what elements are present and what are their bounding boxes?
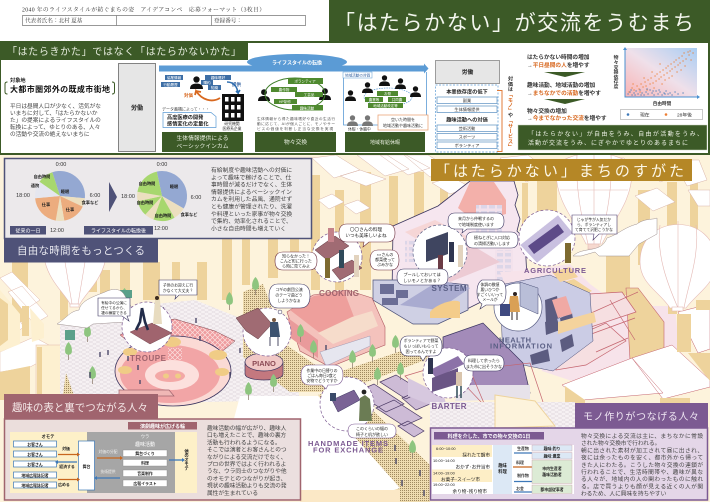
- text: barter description: 朝に出された素材が加工されて昼に出され、: [581, 446, 703, 454]
- theatre diagram: 地域広報誌記者: [21, 473, 49, 478]
- city illustration background: COOKING: [319, 289, 359, 298]
- goals list: →今までなかった交流を増やす: [527, 114, 607, 122]
- balloons: [45, 153, 710, 311]
- speech bubble: daily meal: 作業中の日替りの: [306, 368, 338, 373]
- labour box: [118, 64, 156, 152]
- scheme: barter: HP制作: [279, 99, 291, 104]
- speech bubble: pool: しいモノとかある？: [403, 277, 441, 284]
- text: free time description: とも健康が管理されたり、洗濯: [211, 202, 292, 210]
- pie chart: conventional day: 通院: [31, 182, 40, 189]
- scene labels: TROUPE: [130, 354, 167, 363]
- upper city blocks: [12, 155, 710, 322]
- heading: town view: 「はたらかない」まちのすがた: [435, 163, 684, 180]
- pie chart: conventional day: 従来の一日: [15, 228, 41, 234]
- white big roof: [215, 396, 400, 490]
- text: barter description: わるため、人に興味を持ちやすい: [581, 490, 667, 498]
- city illustration background: INFORMATION: [490, 342, 552, 350]
- theatre diagram: 地域広報誌記者: [21, 483, 49, 488]
- text: barter description: る人々が、地域内の人の関わったものに触れ: [581, 475, 703, 483]
- scheme: basic income: ベーシックインカム: [176, 143, 229, 150]
- piano drum: [245, 353, 283, 380]
- target area text block: 対象地: [10, 76, 26, 84]
- cooking building: [287, 290, 385, 367]
- speech box: child pickup: かなくて大丈夫？: [163, 288, 193, 293]
- text: hobby description: のオモテとのつながりが起き、: [207, 474, 286, 482]
- speech bubble: extra food: [464, 355, 504, 371]
- text: hobby description: プロの世界ではよく行われるよ: [207, 460, 286, 468]
- scheme: community paid leave: 農業等: [369, 97, 380, 102]
- pie chart: after lifestyle change: 自由時間: [139, 180, 155, 187]
- target area text block: 転換によって、ゆとりのある、人々: [10, 123, 100, 131]
- speech bubble: chair size: このくらいの幅の: [356, 425, 388, 431]
- theatre diagram: 広報イラスト: [133, 481, 157, 486]
- labour box: 労働: [131, 104, 143, 112]
- labour breakdown stack: 本業依存度の低下: [446, 88, 488, 96]
- thought bubble: theme song: しようかなぁ: [277, 298, 301, 303]
- market day table: 市内生産者: [542, 466, 562, 471]
- scatter chart: 物々交換依存度: [612, 54, 618, 90]
- vignette: cooking stall: [312, 228, 362, 282]
- speech box: potatoes: じゃが芋が人気だか: [577, 217, 611, 222]
- scheme: community paid leave: 空いた時間を: [391, 116, 415, 122]
- purple handmade market rows: [356, 375, 430, 437]
- text: barter description: る。店で買うよりも顔が見える近くの人が関: [581, 482, 703, 490]
- pie chart: after lifestyle change: 食事など: [181, 211, 198, 218]
- speech bubble: cleaning: [466, 232, 518, 248]
- concept band background: [0, 41, 710, 155]
- market day table: 採れたて朝市: [462, 452, 490, 458]
- text: free time description: 有給制度や趣味活動への対価に: [211, 166, 292, 174]
- pie chart: conventional day: [10, 162, 100, 234]
- pie chart: conventional day: 食事など: [82, 199, 99, 206]
- speech bubble: new discovery: 知らなかった！: [282, 252, 310, 258]
- stage circle: [115, 319, 235, 406]
- speech bubble: health mail: 悪いひつか: [481, 287, 500, 292]
- pie chart: after lifestyle change: 自由時間: [155, 212, 171, 219]
- main title banner: 「はたらかない」が交流をうむまち: [334, 12, 694, 35]
- speech box: child pickup: [159, 280, 197, 299]
- goals list: はたらかない時間の増加: [527, 53, 590, 61]
- text: barter description: 物々交換による交流は主に、まちなかに常設: [581, 432, 703, 440]
- speech box: potatoes: ら、ボランティアし: [577, 222, 611, 227]
- plaza paving: [60, 300, 300, 405]
- speech bubble: cooking praise: いつも美味しいよね: [345, 232, 387, 239]
- scheme: community paid leave: 共同農: [392, 97, 403, 102]
- right pink frame building: [500, 264, 680, 391]
- scatter chart: [612, 47, 702, 120]
- market day table: 都市部従事者: [540, 487, 564, 492]
- speech bubble: health mail: [477, 280, 506, 309]
- labour breakdown stack: 副業: [463, 97, 472, 104]
- speech bubble: health mail: メールが: [482, 297, 498, 302]
- pie chart: conventional day: 仕事: [42, 201, 51, 208]
- pie chart: conventional day: 仕事: [66, 206, 75, 213]
- theatre diagram: 対価の分配: [99, 449, 118, 454]
- scheme: basic income: 対価: [184, 92, 193, 99]
- theatre diagram: [10, 432, 197, 493]
- theatre diagram: ウラ: [141, 433, 149, 440]
- city illustration background: AGRICULTURE: [524, 266, 586, 275]
- scatter chart: 自由時間: [653, 100, 672, 107]
- text: free time description: [211, 166, 292, 232]
- speech bubble: chair size: 椅子と机が欲しい: [356, 431, 388, 437]
- market day table: [432, 445, 574, 495]
- speech box: potatoes: て育てて沢肥こうかな: [575, 227, 613, 232]
- text: barter description: [581, 432, 703, 498]
- vignette: system meeting: [413, 225, 467, 279]
- speech bubble: daily meal: 安物でどうですか: [306, 378, 338, 383]
- market day table: 趣味活動者: [542, 472, 562, 477]
- scheme: barter: 動に応じて、AIが個人ごとに、モノやサー: [257, 121, 335, 126]
- speech bubble: volunteer vegetables: もいっぱいもらって: [404, 344, 438, 348]
- pie chart: after lifestyle change: 6:00: [191, 195, 201, 201]
- speech bubble: transfer: [448, 213, 504, 233]
- target area text block: 大都市圏郊外の既成市街地: [10, 84, 110, 94]
- labour breakdown stack: [436, 60, 502, 152]
- theatre diagram: 趣味活動: [135, 441, 155, 448]
- theatre diagram: お客さん: [27, 452, 43, 457]
- scheme: community paid leave: 地域活動の対価: [345, 72, 371, 78]
- text: hobby description: 活動も行われるようになる。: [207, 438, 281, 446]
- market day table: 料理: [516, 460, 524, 465]
- speech bubble: new discovery: [275, 252, 317, 270]
- thought bubble: theme song: のテーマ曲どう: [275, 292, 303, 298]
- speech box: potatoes: [572, 215, 617, 240]
- market day table: 余り物･残り物市: [453, 488, 487, 495]
- theatre diagram: 経済する: [59, 464, 75, 469]
- text: barter description: された物々交換市で行われる。: [581, 439, 660, 447]
- clouds: [57, 218, 657, 328]
- market day table: 19:00~22:00: [433, 482, 456, 487]
- scheme: basic income: 生体情報提供による: [176, 134, 228, 142]
- pie chart: conventional day: 自由時間: [34, 173, 50, 180]
- heading: working style: 「はたらきかた」ではなく「はたらかないかた」: [7, 46, 241, 58]
- speech bubble: transfer: で地域制度使います: [458, 221, 494, 227]
- speech bubble: vegetables: 都菜使って: [375, 256, 395, 262]
- city illustration background: HANDMADE ITEMS: [308, 439, 388, 448]
- scheme: basic income: 感情変化の定量化: [167, 120, 209, 128]
- scheme: basic income: データ蓄積によって・・・: [162, 106, 210, 112]
- market day table: 趣味:釣り: [544, 446, 561, 451]
- right white roofs: [562, 290, 710, 404]
- speech bubble: health mail: すごくいいって: [477, 292, 503, 297]
- text: hobby description: そこでは演者とお客さんとのつ: [207, 446, 287, 454]
- goals list: →平日昼間の人を増やす: [527, 61, 590, 69]
- labour breakdown stack: 芸術活動: [459, 125, 475, 132]
- scheme: basic income: [161, 75, 244, 152]
- main title banner: [329, 0, 710, 42]
- theatre diagram: 音楽制作: [137, 471, 153, 476]
- vignette: health: [494, 282, 542, 331]
- theatre diagram: 他のオモテ: [184, 448, 190, 472]
- green conclusion box: [518, 125, 707, 150]
- pie chart: after lifestyle change: 12:00: [154, 226, 168, 232]
- central pink and lavender building: [392, 181, 527, 309]
- theatre diagram: 広める: [58, 482, 70, 487]
- text: hobby description: 趣味活動の幅が広がり、趣味人: [207, 424, 287, 432]
- theatre diagram: 対価: [62, 446, 70, 451]
- header: competition line and entry table: [0, 0, 329, 41]
- panel: barter market: 料理を介した、市での物々交換の1日: [448, 433, 530, 440]
- labour breakdown stack: 生体情報提供: [454, 106, 480, 113]
- speech box: child pickup: 子供のお迎えに行: [163, 282, 193, 288]
- text: hobby description: ながりによる交流だけでなく、: [207, 453, 286, 461]
- vignette: troupe dancers: [122, 296, 172, 352]
- labour breakdown stack: 労働: [462, 68, 473, 76]
- speech bubble: cooking praise: [339, 224, 395, 247]
- scheme: community paid leave: お祭: [384, 91, 392, 96]
- target area text block: いまちに対して、「はたらかないか: [10, 109, 98, 117]
- target area text block: 平日は昼間人口が少なく、活気がな: [10, 102, 101, 110]
- scheme: barter: 趣味活動: [300, 106, 315, 110]
- vertical note on compensation: 対価は 「モノ」 や 「サービス」: [507, 75, 513, 149]
- scheme: basic income: 購約: [203, 80, 211, 85]
- lifestyle shift arrow: [159, 54, 428, 74]
- text: free time description: や料理といった家事が物々交換: [211, 210, 292, 218]
- theatre diagram: 舞台づくり: [135, 451, 155, 456]
- speech bubble: daily meal: ごはん毎日2食と: [307, 373, 337, 378]
- speech bubble: chair size: [348, 424, 396, 438]
- vignette: agriculture greenhouse: [519, 210, 575, 266]
- market day table: 料理: [498, 468, 507, 475]
- tan dotted streets: [62, 284, 440, 502]
- city illustration background: BARTER: [432, 402, 467, 411]
- scheme: barter: 農作物: [279, 87, 290, 92]
- speech box: practice: [98, 298, 130, 321]
- scheme: barter: ビスの価値を判断し正当な交換を実現: [257, 126, 333, 131]
- goals list: 物々交換の増加: [527, 107, 567, 115]
- market day table: 生産物: [517, 446, 529, 451]
- speech bubble: health mail: 体調の数値: [481, 282, 500, 287]
- header: competition line and entry table: 2040 年のライフスタイルが紡ぐまちの姿 アイデアコンペ 応募フォーマット（3枚目）: [22, 6, 265, 14]
- speech bubble: new discovery: こんど町に行った: [280, 258, 312, 264]
- theatre diagram: お客さん: [27, 462, 43, 467]
- scheme: community paid leave: 休暇・休職中: [348, 126, 371, 132]
- speech box: practice: 凄の練習できる: [101, 310, 127, 315]
- scheme: community paid leave: 地域有給休暇: [370, 139, 400, 146]
- speech bubble: vegetables: ぶみかな: [377, 261, 393, 267]
- scheme: basic income: 協業情報: [167, 75, 182, 80]
- text: free time description: カムを利用した品風、通院せず: [211, 195, 292, 203]
- text: free time description: で集約、効率化されることで、: [211, 217, 292, 225]
- target area text block: [5, 76, 114, 138]
- scheme: barter: ボランティア: [294, 78, 316, 84]
- panel: free time: [4, 158, 312, 238]
- pie chart: conventional day: 6:00: [90, 193, 100, 199]
- text: hobby description: 口も増えたことで、趣味の裏方: [207, 431, 287, 439]
- scheme: basic income: 高度医療の開発: [167, 113, 204, 121]
- text: barter description: 夜には余ったものを安く、都市外から帰って: [581, 454, 703, 462]
- speech bubble: cleaning: の清掃活動いします: [474, 240, 510, 246]
- market day table: 趣味: [498, 462, 507, 469]
- scheme: community paid leave: [343, 72, 428, 152]
- market day table: 趣味:農業: [544, 454, 561, 458]
- lifestyle shift arrow: ライフスタイルの転換: [272, 60, 322, 66]
- scheme: basic income: 医療系企業: [223, 126, 242, 131]
- heading: more free time: 自由な時間をもっとつくる: [17, 244, 145, 257]
- scheme: basic income: 趣味嗜好: [211, 75, 226, 80]
- speech bubble: volunteer vegetables: ボランティアで野菜: [404, 338, 438, 343]
- goals list: 趣味活動、地域活動の増加: [527, 81, 596, 89]
- scheme: basic income: 知識: [211, 85, 218, 90]
- text: free time description: 事時間が減るだけでなく、生体: [211, 181, 292, 189]
- scheme: basic income: 提供: [232, 81, 241, 88]
- green conclusion box: 活動が交流をうみ、にぎやかでゆとりのあるまちに: [528, 139, 688, 147]
- speech bubble: volunteer vegetables: 困ってるんですよ: [406, 349, 436, 354]
- heading: making connections: [575, 403, 708, 428]
- speech bubble: new discovery: ら時に見てみよ: [282, 262, 310, 268]
- text: free time description: 情報提供によるベーシックイン: [211, 188, 292, 196]
- labour breakdown stack: スポーツ: [459, 134, 475, 140]
- speech bubble: cooking praise: 〇〇さんの料理: [350, 226, 382, 233]
- scheme: basic income: 研究機関: [224, 121, 240, 126]
- speech bubble: extra food: 料理して余ったら: [468, 357, 500, 363]
- health building: [500, 267, 596, 371]
- speech bubble: pool: プールしておいてほ: [403, 271, 441, 278]
- speech bubble: daily meal: [301, 365, 343, 389]
- market day table: お金: [516, 486, 524, 491]
- theatre diagram: お客さん: [27, 442, 43, 447]
- vignette: handmade furniture: [320, 377, 374, 431]
- text: hobby description: 現状の趣味活動よりも交流の発: [207, 482, 287, 490]
- panel: hobby connections: 演劇趣味が広げる輪: [140, 423, 185, 430]
- speech bubble: volunteer vegetables: [400, 336, 442, 361]
- trees: [65, 277, 416, 458]
- scheme: barter: 工芸品: [304, 92, 315, 97]
- barter market: [405, 323, 544, 414]
- city illustration background: HEALTH: [499, 336, 531, 344]
- pie chart: conventional day: 12:00: [50, 228, 64, 234]
- heading: hobby connections: [4, 394, 158, 419]
- vignette: pianist: [236, 308, 291, 356]
- green conclusion box: 「はたらかない」が自由をうみ、自由が活動をうみ、: [528, 130, 703, 138]
- speech bubble: transfer: 来月から仲戦するの: [458, 215, 494, 221]
- lower right tile area: [430, 402, 575, 428]
- heading: hobby connections: 趣味の表と裏でつながる人々: [12, 401, 148, 414]
- market day table: 制作物: [517, 473, 529, 478]
- vignette: barter stall: [423, 348, 473, 398]
- scatter chart: 現在: [640, 112, 650, 118]
- theatre diagram: 舞台: [83, 464, 90, 469]
- pie chart: after lifestyle change: ライフスタイルの転換後: [91, 228, 146, 234]
- pie chart: after lifestyle change: 睡眠: [170, 183, 179, 190]
- panel: barter market: [430, 428, 708, 500]
- scatter chart: 28年後: [677, 112, 692, 118]
- speech box: practice: 有給中の公演に: [101, 300, 127, 305]
- text: hobby description: うな、ウラ同士のつながりや他: [207, 467, 287, 475]
- goals list: →まちなかでの活動を増やす: [527, 89, 601, 97]
- text: hobby description: [207, 424, 287, 497]
- theatre diagram: 技術提供: [100, 469, 116, 474]
- scheme: barter: [255, 78, 336, 152]
- theatre diagram: オモテ: [42, 433, 54, 440]
- thought bubble: theme song: コギの劇団公演: [275, 287, 303, 292]
- labour breakdown stack: 趣味活動への対価: [446, 116, 488, 124]
- text: free time description: 小さな自由時間も増えていく: [211, 224, 286, 232]
- speech bubble: cleaning: 極ねとぎに人口対応: [474, 234, 510, 240]
- heading: making connections: モノ作りがつなげる人々: [583, 410, 699, 423]
- lower-left white rooftops: [0, 270, 110, 405]
- arrow between pies: [109, 182, 117, 212]
- header: competition line and entry table: 登録番号：: [214, 16, 242, 24]
- city illustration background: PIANO: [252, 359, 276, 368]
- pie chart: conventional day: 睡眠: [61, 188, 70, 195]
- goals list: [527, 53, 607, 122]
- thought bubble: theme song: [269, 284, 310, 314]
- speech bubble: pool: [397, 269, 448, 285]
- market day table: 14:00~19:00: [433, 470, 456, 476]
- pie chart: after lifestyle change: 自由時間: [137, 199, 153, 206]
- pie chart: after lifestyle change: [84, 162, 201, 234]
- target area text block: の活動や交流の絶えないまちに: [10, 130, 90, 138]
- scheme: barter: 生体情報から得た趣味嗜好や直近の生活行: [257, 116, 335, 121]
- pie chart: conventional day: 18:00: [16, 193, 30, 199]
- speech bubble: vegetables: [370, 250, 399, 270]
- pie chart: after lifestyle change: 0:00: [157, 162, 167, 168]
- scheme: basic income: 行動履歴: [163, 82, 178, 87]
- heading: more free time: [4, 238, 158, 262]
- scheme: barter: 物々交換: [284, 138, 307, 146]
- city illustration background: FOR EXCHANGE: [313, 446, 383, 454]
- scheme: community paid leave: 地域活動や趣味活動に: [383, 122, 423, 128]
- speech bubble: vegetables: ××さんの: [377, 251, 393, 257]
- market day table: おかず･お弁当市: [456, 464, 490, 470]
- pie chart: conventional day: 0:00: [56, 162, 66, 168]
- pie chart: after lifestyle change: 18:00: [121, 194, 135, 200]
- market day table: 10:00~14:00: [433, 458, 456, 463]
- speech bubble: extra food: また市に出そうかな: [466, 363, 502, 369]
- panel: hobby connections: [4, 419, 300, 500]
- city illustration background: [0, 153, 710, 502]
- scheme: community paid leave: 地域活動改定等: [373, 103, 398, 108]
- text: barter description: きた人にわたる。こうした物々交換の連鎖が: [581, 461, 703, 469]
- text: hobby description: 属性が生まれている: [207, 489, 258, 497]
- text: barter description: 行われることで、生活時間帯や、趣味が異な: [581, 468, 703, 476]
- city illustration background: SYSTEM: [432, 284, 467, 293]
- theatre diagram: 料理: [141, 460, 149, 466]
- text: free time description: よって趣味で稼げることで、仕: [211, 173, 291, 181]
- labour breakdown stack: ボランティア: [455, 142, 479, 149]
- market day table: お菓子･スイーツ市: [441, 476, 480, 483]
- speech box: practice: 任せてるから、: [101, 305, 127, 310]
- system building: [373, 280, 470, 324]
- header: competition line and entry table: 代表者氏名：北村 夏基: [25, 16, 83, 24]
- market day table: 6:00~10:00: [436, 446, 456, 451]
- target area text block: た」の提案によるライフスタイルの: [10, 116, 101, 124]
- tiny people: [90, 307, 424, 496]
